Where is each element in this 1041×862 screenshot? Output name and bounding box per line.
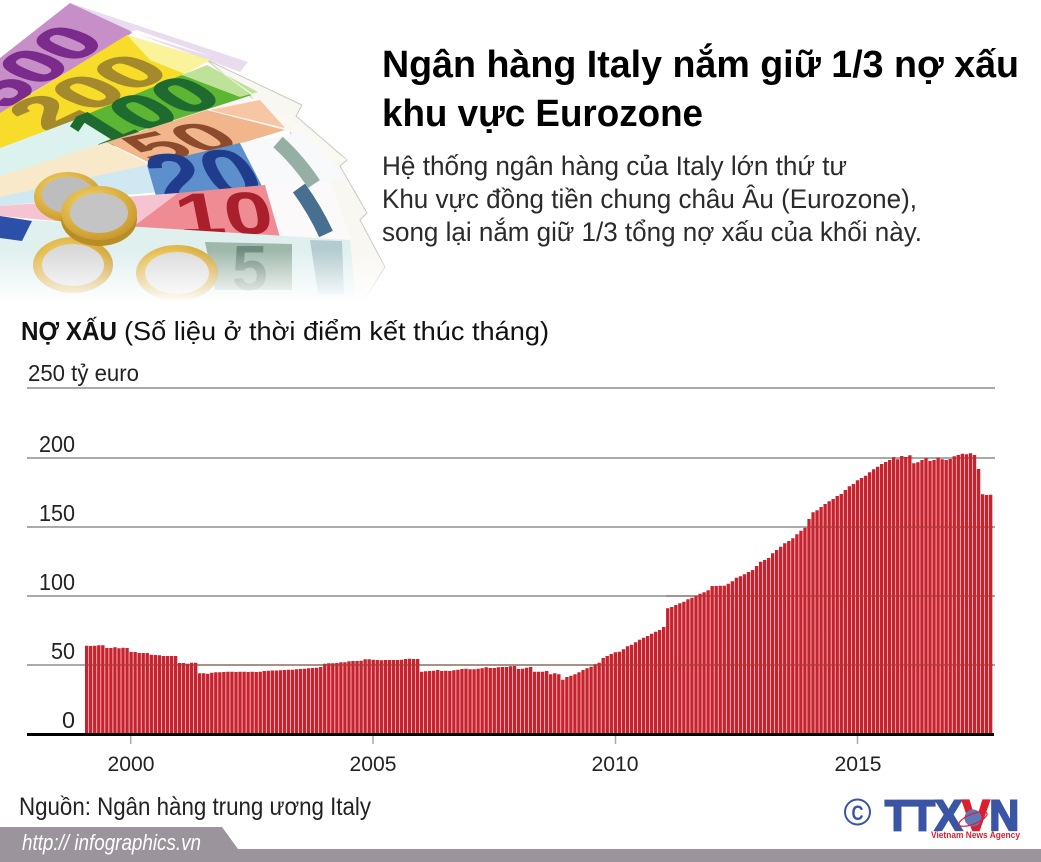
icon: copyright — [845, 800, 870, 825]
bar chart: non-performing loans — [27, 360, 995, 776]
x-axis labels: 2015 — [834, 753, 882, 776]
intro text: Khu vực đồng tiền chung châu Âu (Eurozone), — [382, 183, 917, 214]
photo: euro banknotes and coins — [0, 3, 400, 304]
banknote: 5 euro: 5 — [232, 232, 268, 304]
banknote: 50 euro — [0, 96, 300, 198]
banknote: back white margins — [207, 60, 385, 302]
intro text — [382, 151, 922, 247]
banknote: 500 euro — [0, 3, 248, 118]
monthly bars — [85, 440, 993, 740]
wordmark: TTXVN — [885, 792, 1019, 840]
y-axis labels — [28, 360, 139, 733]
title — [382, 42, 1019, 135]
banknote: 20 euro — [0, 132, 344, 206]
y-axis labels: 250 tỷ euro — [28, 360, 139, 386]
y-axis labels: 0 — [62, 707, 75, 733]
x-axis labels: 2010 — [592, 753, 638, 776]
coins — [33, 172, 218, 301]
y-axis labels: 150 — [39, 500, 75, 526]
y-axis labels: 100 — [39, 569, 75, 595]
chart heading: (Số liệu ở thời điểm kết thúc tháng) — [124, 316, 549, 346]
chart heading: NỢ XẤU — [21, 316, 117, 346]
banknote: 100 euro: 100 — [47, 66, 240, 159]
y-axis labels: 200 — [39, 431, 75, 457]
gridline tint over bars — [85, 527, 993, 665]
icon: copyright: C — [852, 802, 864, 825]
banknote: 10 euro: 10 — [169, 179, 279, 248]
hologram strips — [278, 142, 326, 234]
icon: globe — [957, 809, 989, 829]
title: khu vực Eurozone — [382, 93, 703, 135]
footer url: http:// infographics.vn — [22, 830, 201, 855]
footer bar — [0, 827, 1041, 862]
x-axis ticks — [131, 736, 857, 744]
y-axis labels: 50 — [51, 638, 75, 664]
intro text: Hệ thống ngân hàng của Italy lớn thứ tư — [382, 151, 847, 181]
banknote: 10 euro — [0, 182, 316, 238]
x-axis — [27, 733, 994, 736]
banknote: 50 euro: 50 — [103, 113, 258, 172]
banknote: 5 euro — [0, 216, 354, 294]
intro text: song lại nắm giữ 1/3 tổng nợ xấu của khối này. — [382, 216, 922, 247]
photo fade — [0, 250, 400, 302]
title: Ngân hàng Italy nắm giữ 1/3 nợ xấu — [382, 42, 1019, 86]
agency tagline: Vietnam News Agency — [931, 830, 1021, 841]
x-axis labels — [108, 753, 882, 776]
banknote: 20 euro: 20 — [130, 135, 279, 217]
x-axis labels: 2000 — [108, 753, 154, 776]
logo: TTXVN — [845, 792, 1021, 841]
banknote: 100 euro — [0, 62, 347, 178]
source: Nguồn: Ngân hàng trung ương Italy — [19, 793, 371, 821]
x-axis labels: 2005 — [350, 753, 396, 776]
